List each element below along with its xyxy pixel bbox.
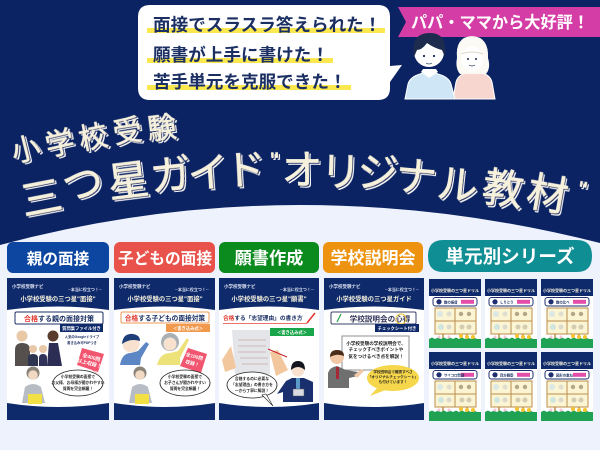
cover title box: 合格する子どもの面接対策 (125, 314, 205, 322)
thumbnail: unit 2: 小学校受験の三つ星ドリル (487, 287, 535, 293)
speech bubble: 一から丁寧に解説！ (235, 388, 269, 393)
speech bubble (160, 370, 210, 396)
family illustration (15, 330, 62, 366)
speech bubble (51, 370, 105, 396)
title: main heading: " (576, 177, 589, 205)
title: small heading: 学 (42, 124, 78, 163)
cover: application writing: ─本当に役立つ！─ (279, 286, 314, 292)
cover: school briefing: 小学校受験ナビ (329, 283, 361, 290)
whiteboard: 気をつけるべき点を解説！ (348, 353, 404, 360)
thumbnail: unit 1: 数の振替 (444, 300, 458, 304)
chip (375, 324, 419, 332)
speech bubble: 合格するのに必要な (235, 376, 269, 381)
footer (114, 403, 215, 420)
cover: child interview: ─本当に役立つ！─ (174, 286, 209, 292)
label: parent interview (7, 242, 109, 273)
navy curved header (0, 0, 600, 245)
cover: parent interview: ─本当に役立つ！─ (67, 286, 102, 292)
title: small heading (8, 110, 178, 169)
badge: 全400問 (82, 352, 101, 363)
yellow speech bubble: 学校説明会で確認すべき (373, 369, 413, 374)
chip: ＜書き込み式＞ (173, 325, 203, 332)
chip (60, 324, 103, 332)
thumbnail: unit 5 (485, 352, 537, 421)
speech bubble: 「志望理由」の書き方を (231, 382, 273, 387)
badge (76, 348, 104, 376)
title: main heading: リ (319, 148, 362, 196)
ribbon: parents' praise (398, 7, 600, 37)
chip: チェックシート付き (378, 325, 416, 332)
thumbnail: unit 2: しりとり (500, 300, 514, 304)
title: main heading: 材 (523, 168, 572, 220)
title: main heading: ジ (356, 149, 399, 197)
cover: child interview: 小学校受験ナビ (119, 283, 151, 290)
title: main heading: 三 (17, 172, 66, 225)
thumbnail: unit 3 (541, 279, 593, 348)
title: main heading: ド (224, 146, 267, 194)
footer (324, 403, 424, 420)
badge: 収録！ (185, 358, 200, 369)
speech bubble: testimonials (138, 5, 402, 100)
thumbnail: unit 4 (429, 352, 481, 421)
footer (7, 403, 109, 420)
label: school briefing (323, 242, 423, 273)
thumbnail: unit 6: 図形の重ね (556, 372, 574, 378)
title: main heading: オ (282, 147, 322, 193)
cover: parent interview (7, 278, 109, 420)
cover: child interview: 小学校受験の三つ星"面接" (127, 294, 203, 303)
title: main heading: つ (59, 158, 107, 210)
title: main heading: 教 (479, 164, 526, 215)
title: main heading (17, 146, 589, 225)
title: main heading: ナ (394, 152, 439, 202)
cover: child interview (114, 278, 215, 420)
thumbnail: unit 5: 四方観察 (500, 372, 514, 378)
thumbnail: unit 2 (485, 279, 537, 348)
thumbnail: unit 4: 小学校受験の三つ星ドリル (431, 360, 479, 366)
title: small heading: 受 (111, 113, 144, 150)
label: child interview: 子どもの面接 (118, 250, 212, 268)
speech bubble: testimonials: 願書が上手に書けた！ (153, 45, 329, 65)
yellow speech bubble: 「オリジナルチェックシート」 (368, 374, 418, 379)
speech bubble: testimonials: 苦手単元を克服できた！ (153, 72, 347, 92)
teacher (129, 366, 152, 404)
cover: application writing (219, 278, 319, 420)
title: main heading: ル (435, 160, 480, 210)
whiteboard (342, 336, 409, 370)
ribbon: parents' praise: パパ・ママから大好評！ (411, 14, 589, 32)
cover: school briefing: ─本当に役立つ！─ (384, 286, 419, 292)
presenter (328, 350, 364, 388)
whiteboard: チェックすべきポイントや (349, 346, 404, 353)
cover title box (331, 312, 416, 324)
badge: 以上収録！ (76, 357, 102, 370)
speech bubble: 質問を完全網羅！ (63, 386, 93, 391)
cover: application writing: 小学校受験ナビ (224, 283, 256, 290)
chip (270, 328, 314, 336)
chip: 質問集ファイル付き (62, 325, 101, 332)
chip (166, 324, 210, 332)
speech bubble: お子さんが聞かれやすい (164, 380, 206, 385)
thumbnail: unit 6: 小学校受験の三つ星ドリル (543, 360, 591, 366)
cover title box (121, 312, 209, 323)
footer (219, 403, 319, 420)
paper and hands (222, 330, 288, 376)
title: small heading: 小 (8, 131, 44, 169)
title: main heading: " (270, 148, 279, 175)
cover: parent interview: 人気のGoogleドライブ (65, 334, 100, 339)
speech bubble: 小学校受験の面接で (61, 374, 95, 379)
speech bubble: 小学校受験の面接で (168, 374, 202, 379)
label: parent interview: 親の面接 (27, 250, 90, 268)
thumbnail: unit 1: 小学校受験の三つ星ドリル (431, 287, 479, 293)
chip: ＜書き込み式＞ (277, 329, 307, 336)
title: main heading: ガ (148, 150, 193, 200)
cover: school briefing: 小学校受験の三つ星ガイド (336, 294, 412, 303)
title: main heading: 星 (105, 156, 151, 206)
title: small heading: 校 (76, 119, 111, 157)
badge (180, 348, 207, 373)
cover title box (15, 312, 103, 324)
badge: 全100問 (185, 351, 204, 362)
thumbnail: unit 6 (541, 352, 593, 421)
speech bubble: testimonials: 面接でスラスラ答えられた！ (153, 15, 381, 35)
yellow speech bubble: も付けています！ (379, 379, 407, 384)
yellow speech bubble (367, 365, 419, 396)
thumbnail: unit 3: 数の比べ (556, 300, 570, 304)
cover: parent interview: 書き込み可PDFつき (67, 340, 97, 345)
whiteboard: 小学校受験の学校説明会で、 (346, 340, 406, 347)
speech bubble: 質問を完全網羅！ (170, 386, 200, 391)
icon: parents (405, 33, 495, 99)
thumbnail: unit 5: 小学校受験の三つ星ドリル (487, 360, 535, 366)
title: main heading: イ (186, 149, 230, 197)
cover: school briefing (324, 278, 424, 420)
label: application writing (219, 242, 319, 273)
speech bubble (227, 372, 277, 406)
label: unit series (428, 240, 592, 272)
cover: application writing: 小学校受験の三つ星"願書" (231, 294, 307, 303)
thumbnail: unit 3: 小学校受験の三つ星ドリル (543, 287, 591, 293)
title: small heading: 験 (145, 110, 178, 147)
label: child interview (114, 242, 215, 273)
cover: parent interview: 小学校受験の三つ星"面接" (20, 294, 96, 303)
man in suit (277, 361, 313, 402)
cover title box: 合格する親の面接対策 (24, 314, 94, 323)
cover title (223, 313, 315, 324)
teacher (22, 366, 45, 404)
thumbnail: unit 1 (429, 279, 481, 348)
label: application writing: 願書作成 (235, 248, 303, 268)
label: school briefing: 学校説明会 (330, 248, 416, 268)
cover title: 合格する「志望理由」の書き方 (223, 314, 303, 322)
cover title box: 学校説明会の心得 (350, 314, 411, 324)
label: unit series: 単元別シリーズ (445, 246, 575, 267)
children illustration (120, 333, 189, 365)
thumbnail: unit 4: サイコロ問題 (444, 372, 465, 378)
cover: parent interview: 小学校受験ナビ (12, 283, 44, 290)
speech bubble: お父様、お母様が聞かれやすい (51, 380, 105, 385)
